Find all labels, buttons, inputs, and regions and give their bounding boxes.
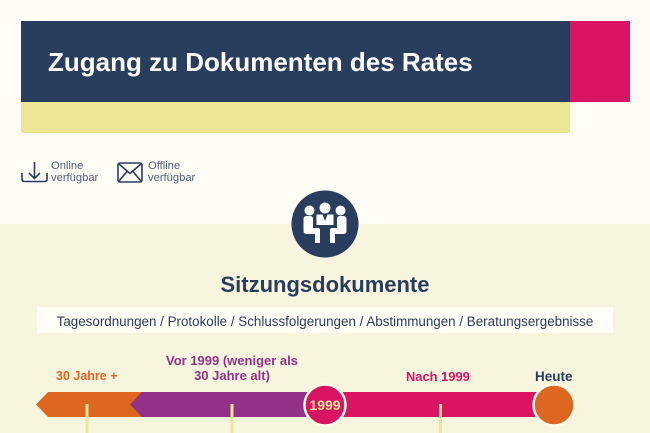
marker: today [532,384,576,426]
label: before 1999: 30 Jahre alt) [194,368,270,383]
label: before 1999 [166,353,298,383]
timeline bars [36,392,536,433]
label: after 1999: Nach 1999 [406,369,470,384]
marker: 1999: 1999 [309,397,341,413]
title banner [21,21,630,133]
label: 30 years plus: 30 Jahre + [56,369,118,383]
label: offline available: verfügbar [148,172,195,184]
legend: online [21,160,98,184]
label: today: Heute [535,369,573,384]
label: offline available: Offline [148,160,180,172]
icon: download [21,162,48,182]
icon: meeting people [292,190,358,258]
heading: Sitzungsdokumente [220,272,430,297]
icon: envelope [117,162,143,183]
yellow band [21,102,570,133]
pink accent block [570,21,630,102]
navy title block [21,21,570,102]
document types strip: Tagesordnungen / Protokolle / Schlussfolgerungen / Abstimmungen / Beratungsergebnisse [57,314,593,329]
label: online available: verfügbar [51,172,98,184]
legend: offline [117,160,196,184]
title: Zugang zu Dokumenten des Rates [48,47,473,77]
timeline [36,353,576,433]
label: before 1999: Vor 1999 (weniger als [166,353,298,368]
document types strip [37,307,613,333]
label: offline available [148,160,196,184]
lower section background [0,224,650,433]
label: online available [51,160,98,184]
label: online available: Online [51,160,83,172]
marker: 1999 [303,384,347,426]
